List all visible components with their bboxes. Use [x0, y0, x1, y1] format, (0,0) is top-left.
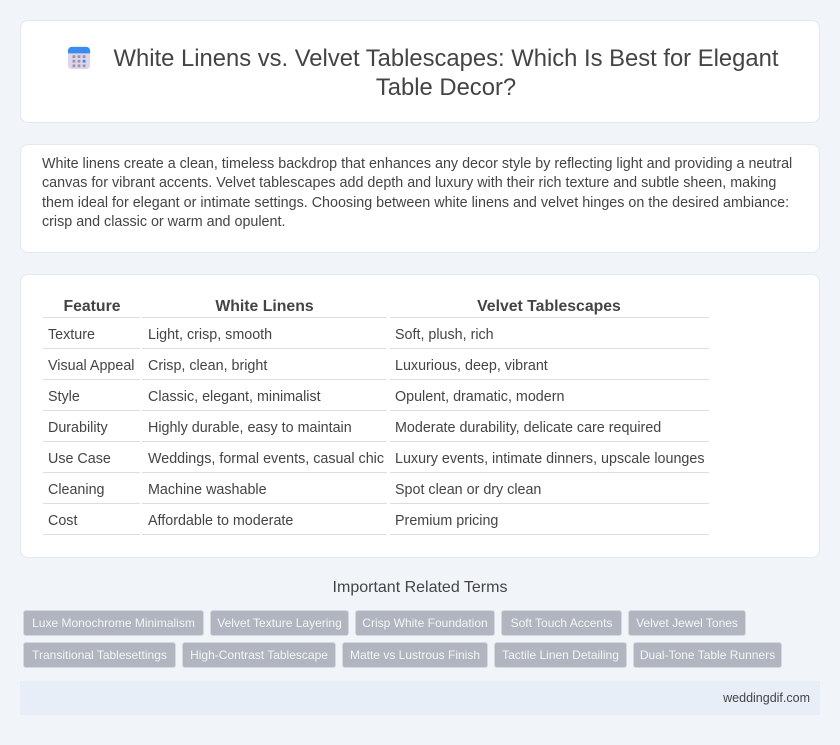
comparison table: Style — [48, 389, 80, 405]
comparison table: Durability — [48, 420, 108, 436]
intro paragraph: them ideal for elegant or intimate settings. Choosing between white linens and velvet hinges on the desired ambiance: — [42, 195, 789, 211]
comparison table: Visual Appeal — [48, 358, 134, 374]
related terms tags: Soft Touch Accents — [511, 616, 612, 630]
comparison table: Luxurious, deep, vibrant — [395, 358, 548, 374]
intro paragraph: canvas for vibrant accents. Velvet tablescapes add depth and luxury with their rich texture and subtle sheen, making — [42, 175, 776, 191]
comparison table: Feature — [63, 298, 121, 315]
heading: Table Decor? — [376, 74, 516, 101]
source credit: weddingdif.com — [723, 691, 810, 705]
comparison table: Machine washable — [148, 482, 267, 498]
intro paragraph: crisp and classic or warm and opulent. — [42, 214, 285, 230]
comparison table: Classic, elegant, minimalist — [148, 389, 321, 405]
intro card — [20, 144, 820, 253]
related terms tags: Transitional Tablesettings — [32, 648, 167, 662]
heading: White Linens vs. Velvet Tablescapes: Which Is Best for Elegant — [114, 45, 778, 72]
related terms tags: High-Contrast Tablescape — [190, 648, 328, 662]
comparison table: Soft, plush, rich — [395, 327, 494, 343]
related terms tags: Luxe Monochrome Minimalism — [32, 616, 195, 630]
comparison table: Cost — [48, 513, 77, 529]
related terms tags: Velvet Jewel Tones — [636, 616, 738, 630]
related terms tags: Velvet Texture Layering — [217, 616, 342, 630]
comparison table: Affordable to moderate — [148, 513, 293, 529]
icon: calendar — [68, 46, 90, 70]
intro paragraph: White linens create a clean, timeless backdrop that enhances any decor style by reflecting light and providing a neutral — [42, 156, 792, 172]
comparison table: Texture — [48, 327, 95, 343]
table card — [20, 274, 820, 558]
comparison table: Light, crisp, smooth — [148, 327, 272, 343]
related terms tags: Tactile Linen Detailing — [502, 648, 619, 662]
comparison table: Velvet Tablescapes — [477, 298, 621, 315]
comparison table: Crisp, clean, bright — [148, 358, 267, 374]
comparison table: Use Case — [48, 451, 111, 467]
related terms heading: Important Related Terms — [333, 579, 507, 596]
footer bar — [20, 681, 820, 715]
comparison table: Moderate durability, delicate care required — [395, 420, 661, 436]
comparison table: Spot clean or dry clean — [395, 482, 541, 498]
comparison table: Opulent, dramatic, modern — [395, 389, 564, 405]
related terms tags: Dual-Tone Table Runners — [640, 648, 775, 662]
comparison table: Premium pricing — [395, 513, 498, 529]
heading — [114, 45, 778, 101]
comparison table: Cleaning — [48, 482, 104, 498]
comparison table: Luxury events, intimate dinners, upscale lounges — [395, 451, 704, 467]
comparison table: Weddings, formal events, casual chic — [148, 451, 384, 467]
comparison table: Highly durable, easy to maintain — [148, 420, 352, 436]
intro paragraph — [42, 156, 792, 230]
title card — [20, 20, 820, 123]
related terms tags: Crisp White Foundation — [362, 616, 488, 630]
comparison table: White Linens — [215, 298, 314, 315]
related terms tags: Matte vs Lustrous Finish — [350, 648, 480, 662]
